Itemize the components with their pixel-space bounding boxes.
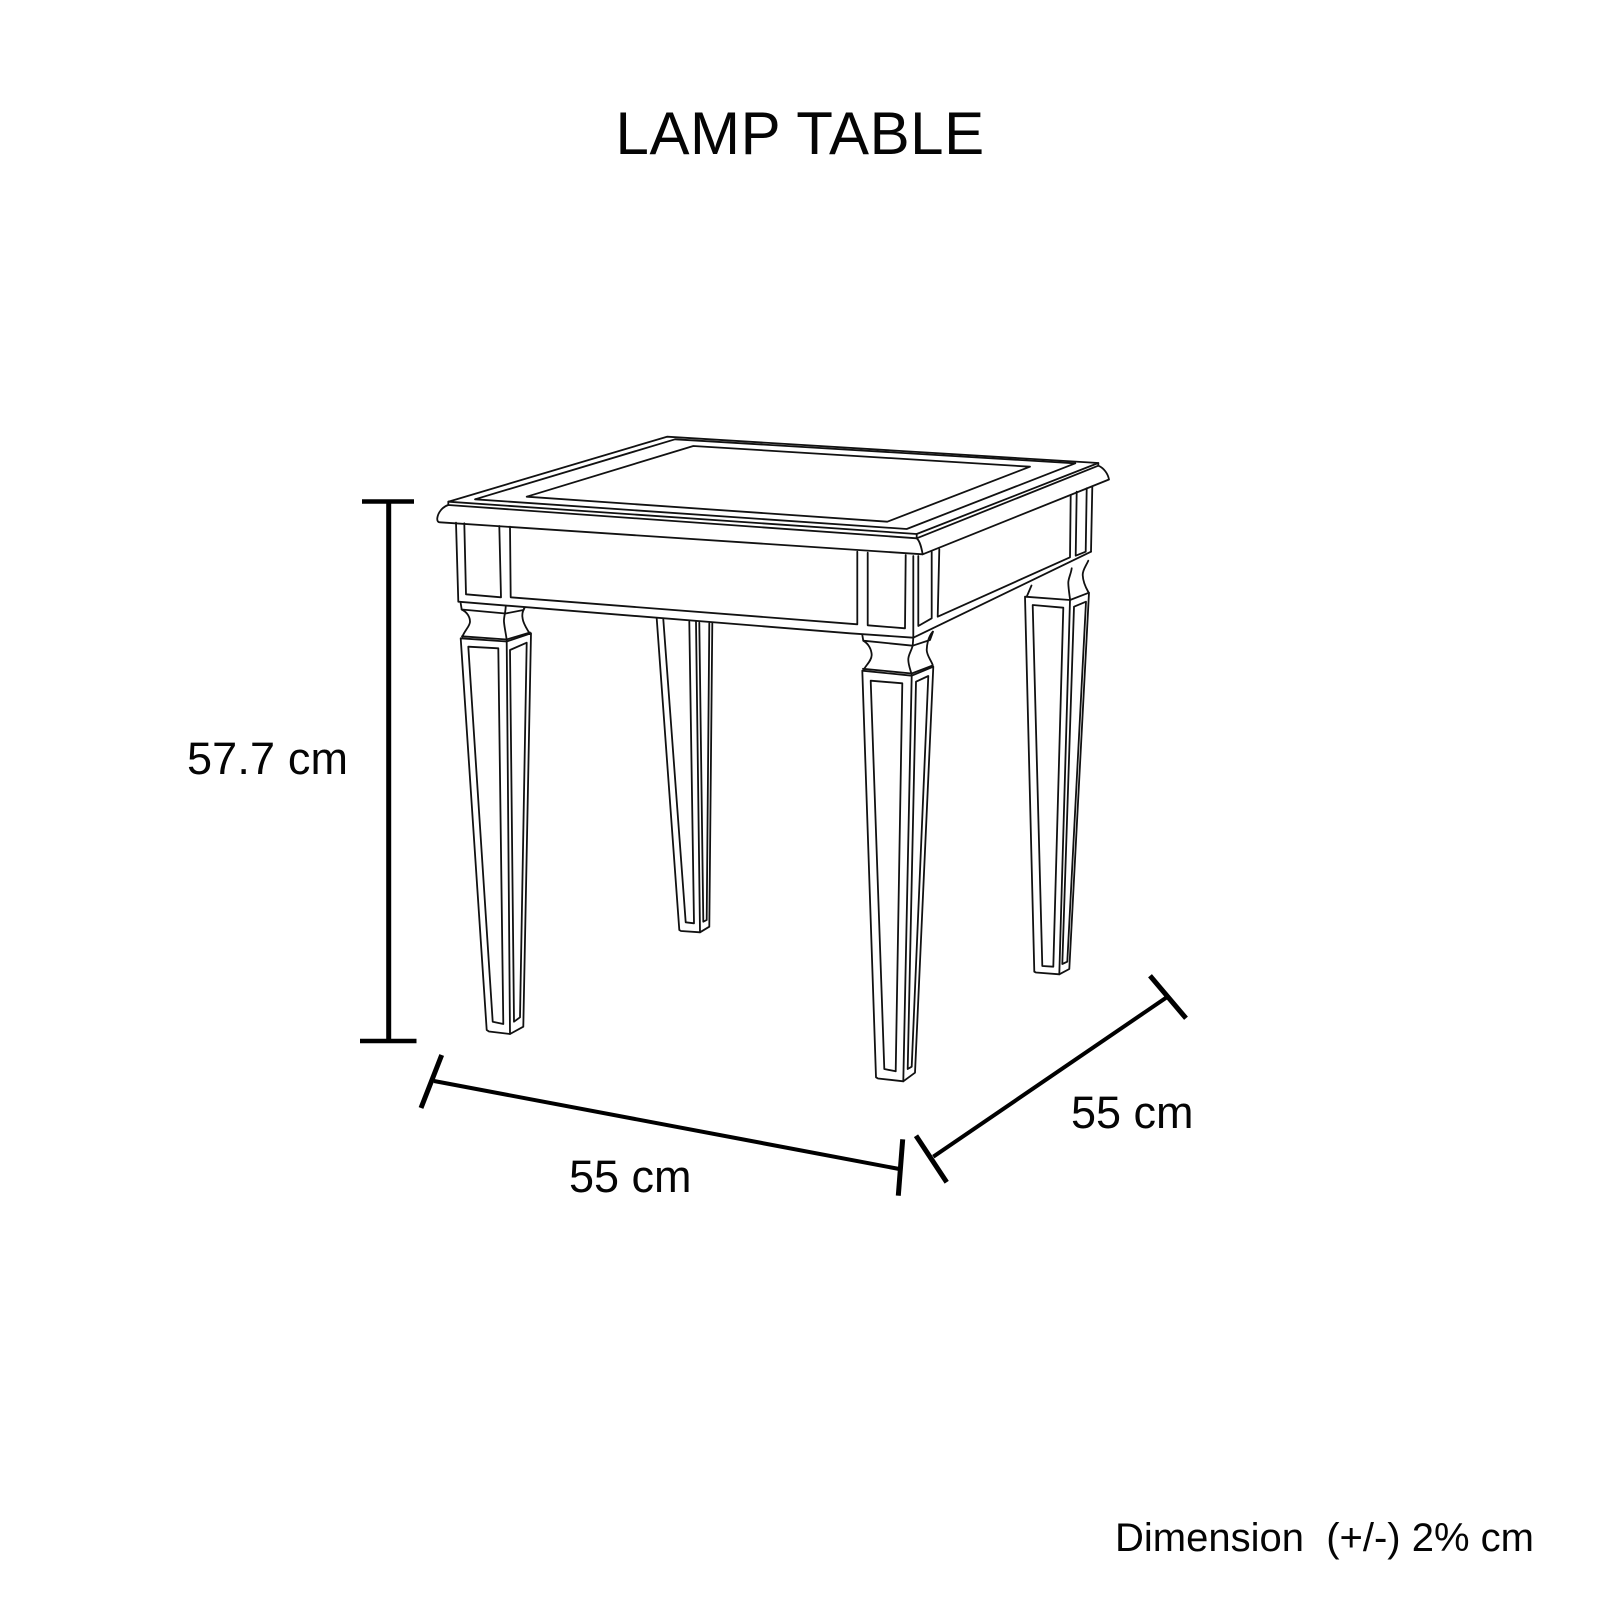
- height dimension line: [360, 502, 416, 1041]
- table top: [437, 437, 1109, 554]
- depth label: 55 cm: [1071, 1087, 1194, 1138]
- front left leg: [461, 603, 531, 1034]
- tolerance note: Dimension (+/-) 2% cm: [1115, 1516, 1534, 1560]
- width dimension line: [421, 1055, 903, 1196]
- table line drawing: [437, 437, 1109, 1081]
- title: LAMP TABLE: [616, 100, 985, 167]
- back right leg: [1025, 561, 1089, 974]
- depth dimension line: [916, 976, 1186, 1182]
- back left leg: [657, 618, 712, 932]
- front right leg: [862, 632, 933, 1081]
- apron front: [456, 523, 1091, 638]
- width label: 55 cm: [569, 1151, 692, 1202]
- height label: 57.7 cm: [187, 733, 348, 784]
- apron side: [918, 487, 1092, 626]
